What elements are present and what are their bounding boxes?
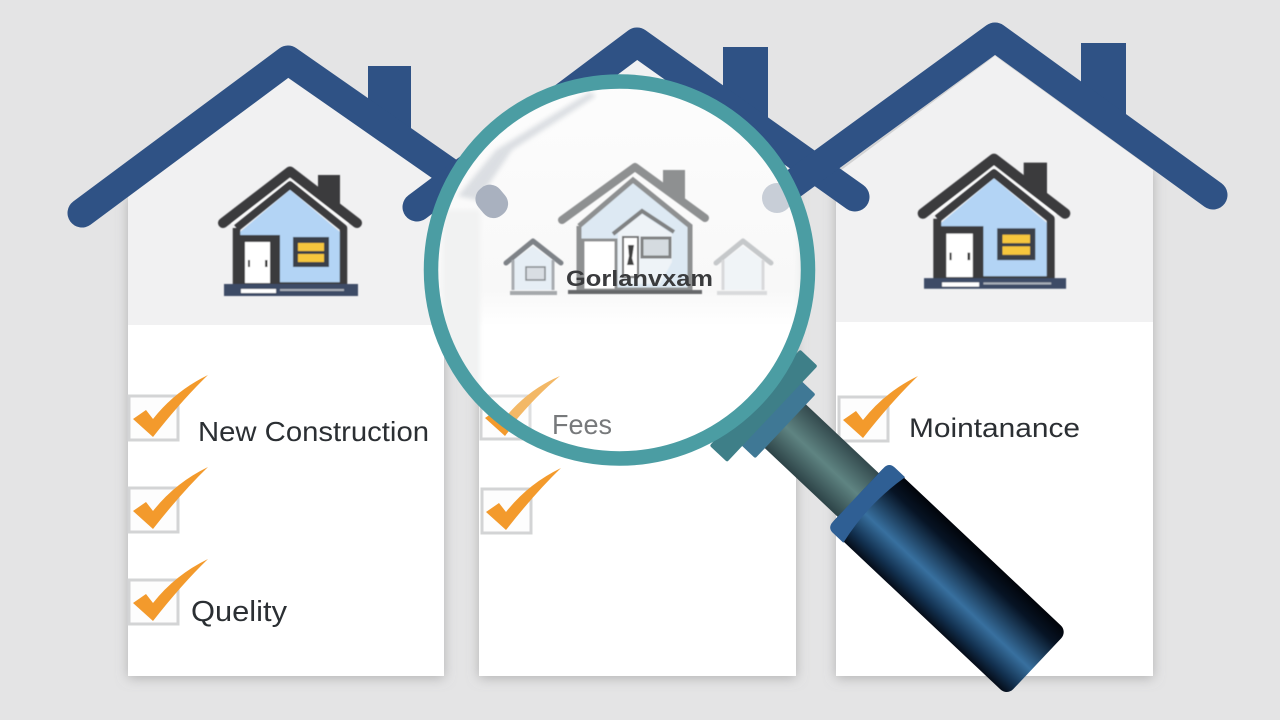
label: New Construction: New Construction — [198, 416, 429, 447]
magnified house group — [506, 167, 771, 295]
label: Mointanance: Mointanance — [909, 413, 1080, 443]
checkbox 1 partly under lens — [481, 374, 560, 439]
lens ring — [431, 82, 808, 458]
shaft — [758, 398, 885, 522]
icon: left house — [223, 172, 358, 296]
icon: right house — [923, 159, 1066, 289]
magnified main house — [562, 167, 705, 294]
lens interior — [444, 89, 801, 428]
grip cap — [827, 462, 905, 543]
roof: middle house — [417, 42, 855, 207]
roof: left house — [82, 60, 496, 213]
magnifying glass handle — [710, 350, 1083, 712]
checkbox 1 with check — [129, 375, 208, 440]
roof: right house — [778, 37, 1213, 195]
checkbox 2 with check — [129, 467, 208, 532]
panel: right house — [836, 56, 1153, 676]
magnified small house right — [716, 241, 771, 295]
checklist: left panel — [129, 375, 429, 628]
magnified small house left — [506, 241, 561, 295]
checkbox with check — [839, 376, 918, 441]
magnifying glass lens — [420, 70, 827, 480]
teal collar — [710, 350, 818, 462]
magnified garbled title: Gorlanvxam — [566, 266, 713, 291]
panel: left house — [128, 78, 444, 676]
checkbox 3 with check — [129, 559, 208, 624]
grip — [828, 463, 1067, 696]
checklist: right panel — [839, 376, 1080, 443]
blue collar — [735, 375, 816, 458]
checklist: middle panel — [481, 374, 561, 533]
panel: middle house — [479, 60, 796, 676]
label: Quelity: Quelity — [191, 596, 288, 628]
label: Fees: Fees — [552, 409, 612, 440]
checkbox 2 with check — [482, 468, 561, 533]
